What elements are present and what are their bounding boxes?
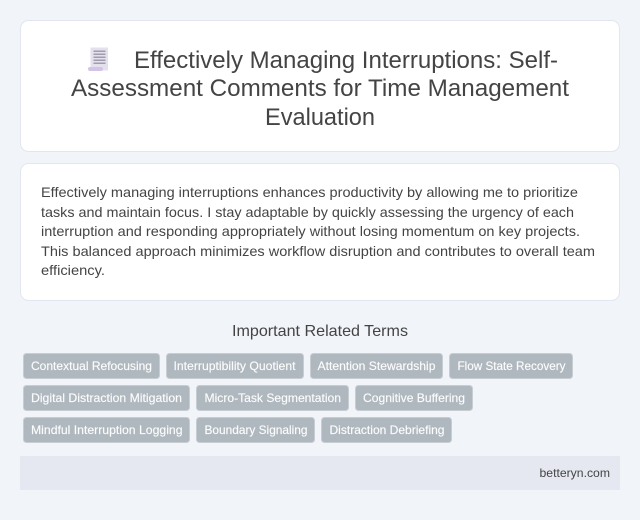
- text block: paragraph: Effectively managing interruptions enhances productivity by allowing me to prioritize: [41, 184, 578, 200]
- tag: Attention Stewardship: [310, 354, 442, 378]
- tag: Digital Distraction Mitigation: Digital Distraction Mitigation: [31, 391, 182, 405]
- text block: paragraph: interruption and responding appropriately without losing momentum on key projects.: [41, 223, 580, 239]
- tag: Boundary Signaling: Boundary Signaling: [204, 423, 308, 437]
- title: Effectively Managing Interruptions: Self-: [134, 47, 558, 74]
- tag: Interruptibility Quotient: Interruptibility Quotient: [174, 359, 296, 373]
- tag: Contextual Refocusing: [24, 354, 160, 378]
- title: Evaluation: [265, 104, 375, 131]
- footer: [20, 456, 620, 490]
- title: Assessment Comments for Time Management: [71, 75, 569, 102]
- text block: paragraph: tasks and maintain focus. I stay adaptable by quickly assessing the urgency of each: [41, 204, 574, 220]
- tag: Cognitive Buffering: [356, 386, 472, 410]
- tag: Boundary Signaling: [196, 418, 314, 442]
- text block: paragraph: This balanced approach minimizes workflow disruption and contributes to overall team: [41, 243, 595, 259]
- tag list: [24, 354, 572, 442]
- tag: Flow State Recovery: Flow State Recovery: [458, 359, 566, 373]
- icon: document scroll: [88, 48, 108, 71]
- tag: Distraction Debriefing: Distraction Debriefing: [330, 423, 444, 437]
- tag: Flow State Recovery: [450, 354, 572, 378]
- tag: Attention Stewardship: Attention Stewardship: [318, 359, 436, 373]
- tag: Micro-Task Segmentation: [196, 386, 348, 410]
- tag: Contextual Refocusing: Contextual Refocusing: [31, 359, 152, 373]
- heading: related terms: Important Related Terms: [232, 323, 408, 340]
- tag: Digital Distraction Mitigation: [24, 386, 190, 410]
- tag: Mindful Interruption Logging: Mindful Interruption Logging: [31, 423, 182, 437]
- text block: paragraph: [41, 184, 595, 278]
- tag: Distraction Debriefing: [322, 418, 452, 442]
- tag: Interruptibility Quotient: [166, 354, 304, 378]
- text block: paragraph: efficiency.: [41, 262, 105, 278]
- title: [71, 47, 569, 131]
- tag: Micro-Task Segmentation: Micro-Task Segmentation: [204, 391, 341, 405]
- panel: title card: [20, 20, 620, 152]
- panel: description: [20, 164, 620, 300]
- tag: Mindful Interruption Logging: [24, 418, 190, 442]
- tag: Cognitive Buffering: Cognitive Buffering: [363, 391, 465, 405]
- footer: betteryn.com: [540, 466, 610, 480]
